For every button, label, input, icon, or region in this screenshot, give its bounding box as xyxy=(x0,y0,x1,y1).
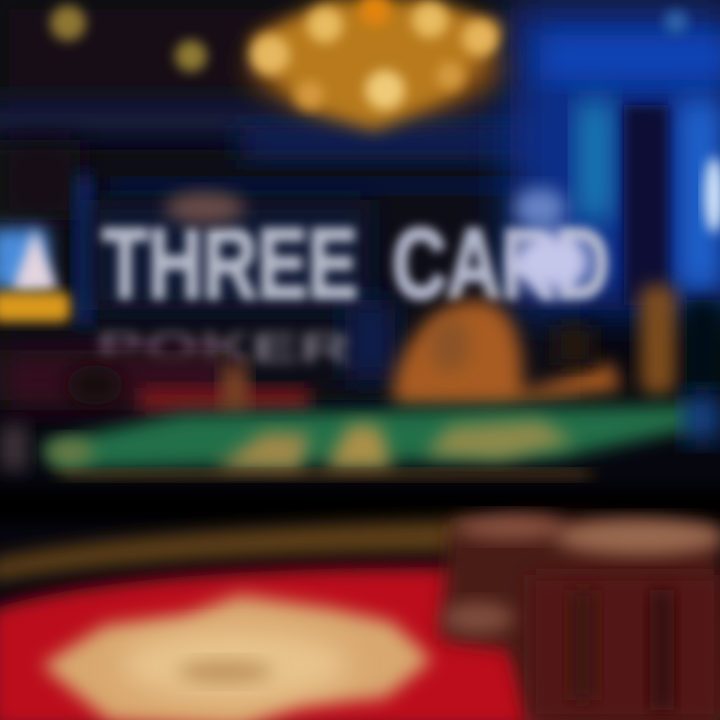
gold table rim xyxy=(0,520,470,582)
cream table emblem xyxy=(42,595,432,720)
sign subtitle: POKER xyxy=(96,324,351,371)
dealers and players at the table xyxy=(0,285,676,412)
sign text xyxy=(102,208,610,320)
chandelier xyxy=(250,0,505,130)
blue stage lights at upper right xyxy=(510,0,720,390)
left logo icon xyxy=(0,228,70,322)
sign highlights xyxy=(165,188,592,292)
sign text: CARD xyxy=(392,208,610,320)
sign text: THREE xyxy=(102,208,358,320)
green card table xyxy=(0,395,720,480)
dark band xyxy=(0,488,720,524)
ceiling lights xyxy=(50,5,688,72)
stacks of chips xyxy=(440,514,720,720)
background: ceiling and hall xyxy=(0,0,720,400)
red felt xyxy=(0,568,560,720)
